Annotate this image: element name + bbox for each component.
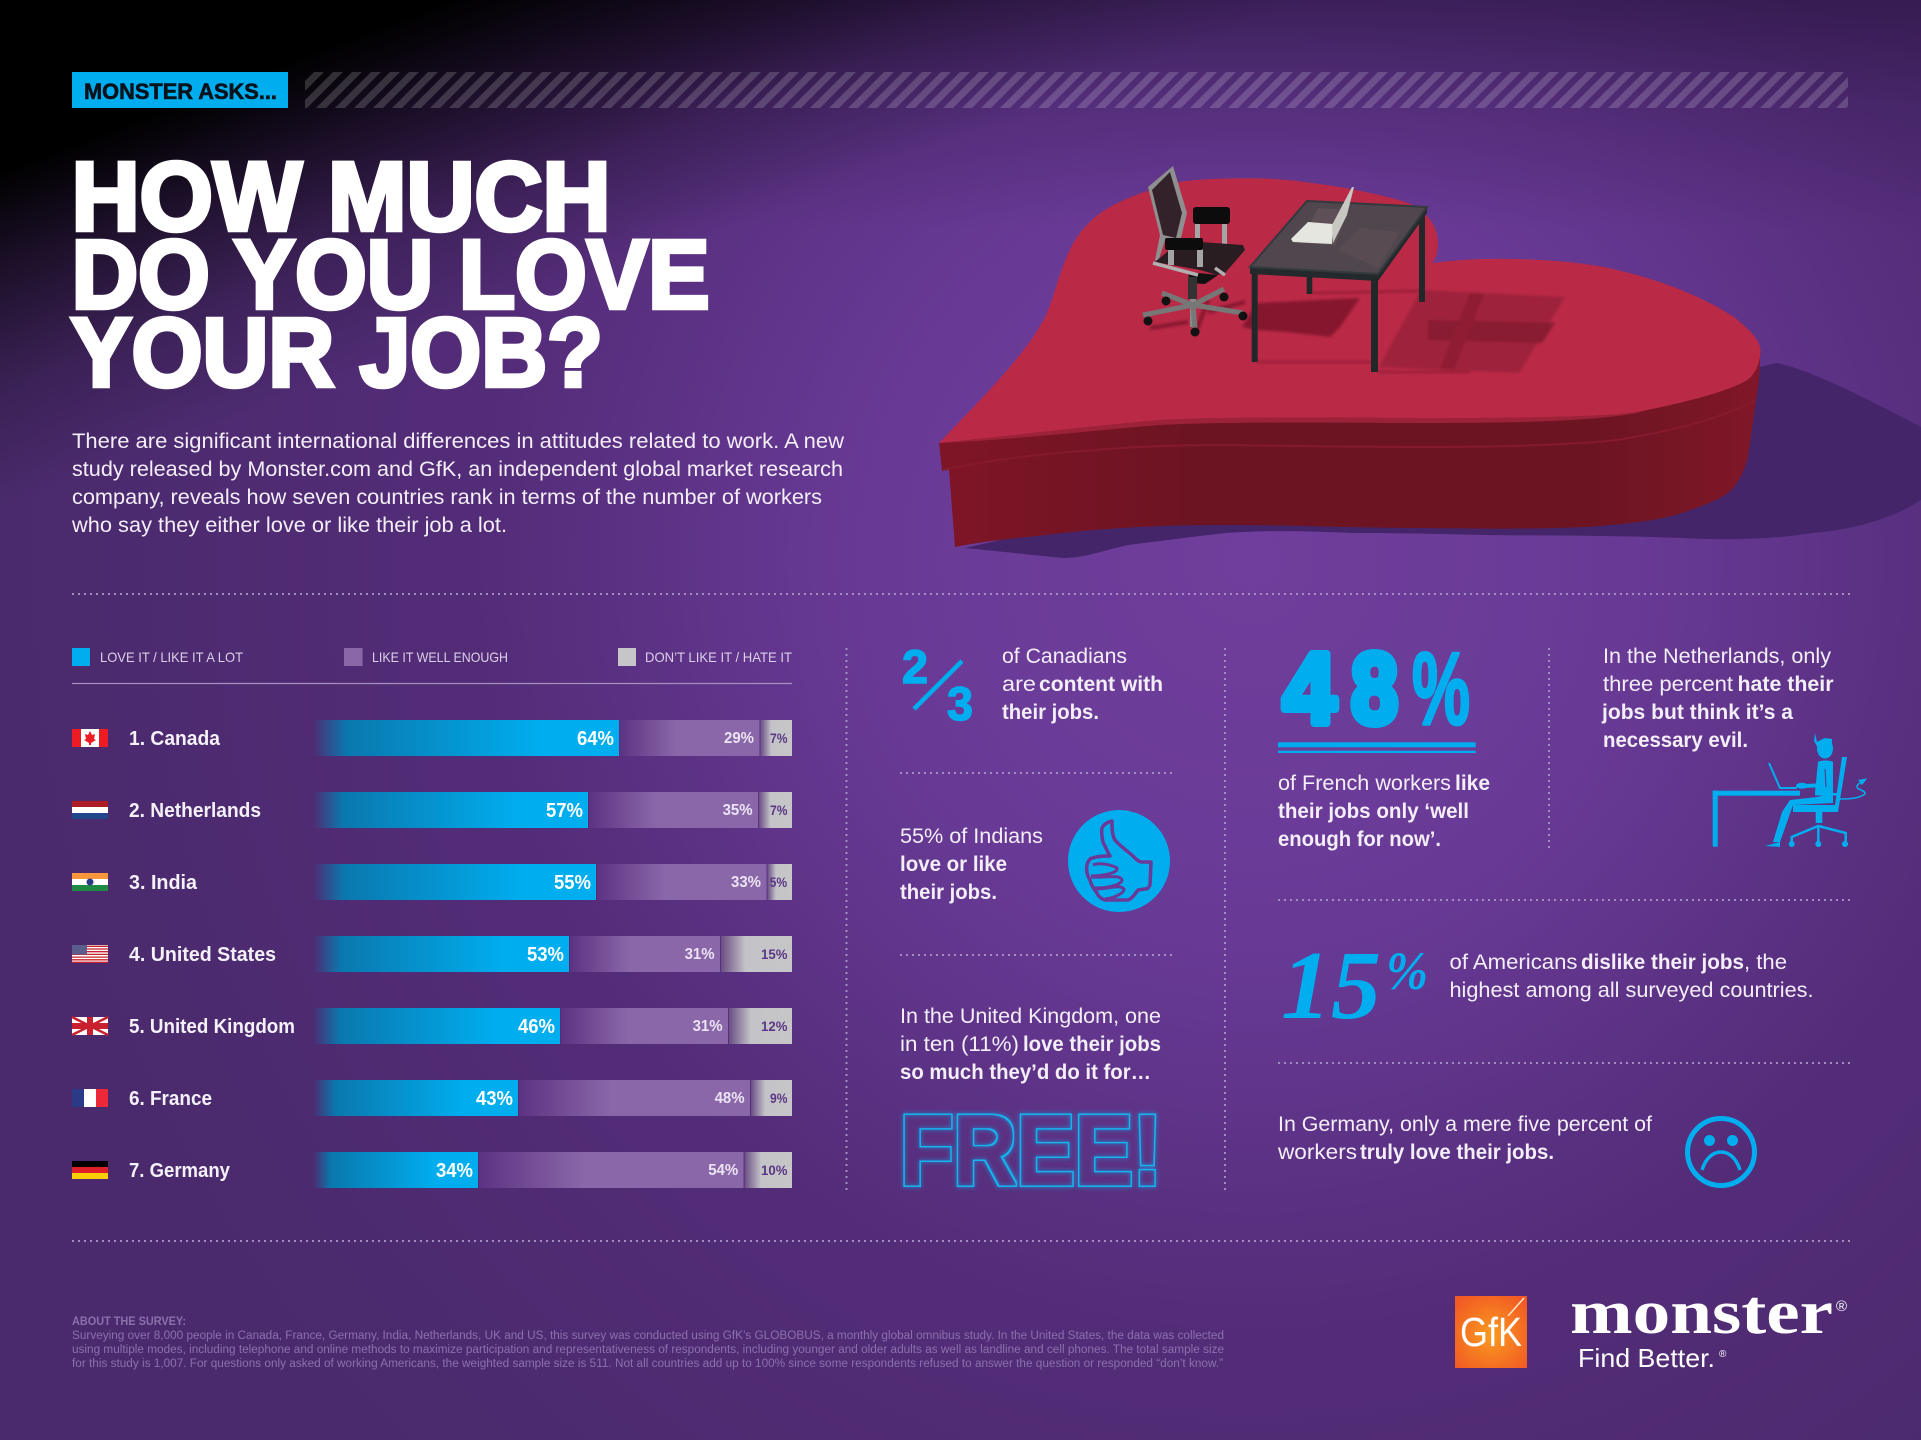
title: HOW MUCH	[72, 142, 611, 251]
logo: monster: ®	[1836, 1298, 1847, 1315]
netherlands text: In the Netherlands, only	[1603, 645, 1832, 668]
row: Germany: 10%	[761, 1162, 788, 1178]
big number: 15	[1281, 932, 1381, 1040]
big number: %	[1386, 941, 1428, 1001]
row: Germany: 7. Germany	[129, 1160, 231, 1182]
title	[71, 142, 710, 407]
big number	[1281, 932, 1428, 1040]
row: India: 55%	[554, 872, 591, 894]
netherlands text	[1601, 645, 1834, 752]
row: Canada: 64%	[577, 728, 614, 750]
row: Netherlands	[72, 792, 792, 828]
stat: Netherlands	[1601, 645, 1867, 847]
icon: devil at desk	[1713, 733, 1867, 847]
americans text	[1450, 951, 1814, 1002]
french text: their jobs only ‘well	[1278, 800, 1469, 823]
icon: sad face	[1688, 1118, 1754, 1186]
stat: Germany	[1277, 1113, 1754, 1186]
big number: 8	[1351, 633, 1398, 745]
canadians text: are	[1002, 673, 1036, 696]
germany text: In Germany, only a mere five percent of	[1278, 1113, 1652, 1136]
icon: thumbs up	[1068, 810, 1170, 912]
row: United States: 31%	[685, 946, 715, 963]
desk	[1250, 201, 1427, 372]
heart shadow	[965, 363, 1921, 558]
tag: monster asks	[72, 72, 288, 108]
about the survey	[72, 1316, 1224, 1370]
french text	[1278, 772, 1490, 851]
row: Germany: 54%	[708, 1162, 738, 1179]
fraction icon: 3	[947, 677, 973, 730]
row: United Kingdom: 31%	[693, 1018, 723, 1035]
neon free: FREE!	[900, 1094, 1162, 1206]
row: United Kingdom: 12%	[761, 1018, 788, 1034]
stat: 48 percent of French	[1278, 631, 1490, 851]
legend: LIKE IT WELL ENOUGH	[372, 649, 508, 665]
row: Canada: 1. Canada	[129, 728, 221, 750]
uk text	[900, 1005, 1161, 1084]
indians text	[900, 825, 1043, 904]
row: France	[72, 1080, 792, 1116]
office chair	[1143, 166, 1248, 336]
chair shadow	[1150, 298, 1360, 337]
uk text: love their jobs	[1023, 1033, 1161, 1056]
title: DO YOU LOVE	[72, 220, 710, 329]
logo: monster: monster	[1570, 1279, 1833, 1347]
canadians text: of Canadians	[1002, 645, 1127, 668]
big number: 4	[1283, 633, 1336, 745]
row: India	[72, 864, 792, 900]
uk text: in ten (11%)	[900, 1033, 1019, 1056]
fraction icon	[902, 640, 973, 730]
uk text: so much they’d do it for…	[900, 1061, 1151, 1084]
row: France: 9%	[770, 1090, 788, 1106]
heart lid edge	[939, 411, 1645, 443]
legend: LOVE IT / LIKE IT A LOT	[100, 649, 243, 665]
row: Netherlands: 57%	[546, 800, 583, 822]
stat: 15 percent of Americans	[1281, 932, 1814, 1040]
row: Netherlands: 35%	[723, 802, 753, 819]
row: United States: 4. United States	[129, 944, 276, 966]
row: India: 3. India	[129, 872, 198, 894]
row: Canada	[72, 720, 792, 756]
canadians text: their jobs.	[1002, 701, 1099, 724]
about the survey: ABOUT THE SURVEY:	[72, 1316, 186, 1328]
intro paragraph: There are significant international differences in attitudes related to work. A new	[72, 430, 845, 453]
netherlands text: three percent	[1603, 673, 1733, 696]
row: United Kingdom	[72, 1008, 792, 1044]
logo: GfK	[1455, 1296, 1527, 1368]
netherlands text: necessary evil.	[1603, 729, 1748, 752]
underline	[1278, 742, 1476, 753]
logo: monster: ®	[1719, 1349, 1727, 1360]
indians text: love or like	[900, 853, 1007, 876]
row: Germany	[72, 1152, 792, 1188]
indians text: their jobs.	[900, 881, 997, 904]
heart side	[939, 350, 1760, 547]
uk text: In the United Kingdom, one	[900, 1005, 1161, 1028]
stat: two thirds of Canadians	[902, 640, 1163, 730]
row: France: 48%	[715, 1090, 745, 1107]
row: France: 43%	[476, 1088, 513, 1110]
striped header band	[305, 72, 1848, 108]
row: United Kingdom: 46%	[518, 1016, 555, 1038]
germany text: workers	[1277, 1141, 1357, 1164]
americans text: of Americans	[1450, 951, 1578, 974]
intro paragraph: study released by Monster.com and GfK, an independent global market research	[72, 458, 843, 481]
stat: Indians	[900, 810, 1170, 912]
fraction icon: 2	[902, 640, 928, 693]
about the survey: using multiple modes, including telephone and online methods to maximize participation and representativeness of respondents, including younger and older adults as well as landline and cell phones. The total sample size	[72, 1344, 1224, 1356]
about the survey: Surveying over 8,000 people in Canada, France, Germany, India, Netherlands, UK and US, this survey was conducted using GfK’s GLOBOBUS, a monthly global omnibus study. In the United States, the data was collected	[72, 1330, 1224, 1342]
table shadow	[1257, 290, 1565, 373]
stat: United Kingdom	[900, 1005, 1162, 1206]
row: Germany: 34%	[436, 1160, 473, 1182]
tag: monster asks: MONSTER ASKS...	[84, 79, 277, 104]
logo: monster: Find Better.	[1578, 1343, 1715, 1373]
legend: DON’T LIKE IT / HATE IT	[645, 649, 792, 665]
row: United Kingdom: 5. United Kingdom	[129, 1016, 295, 1038]
laptop	[1291, 187, 1354, 244]
logo: monster	[1570, 1279, 1847, 1373]
french text: of French workers	[1278, 772, 1451, 795]
french text: like	[1455, 772, 1490, 795]
row: Canada: 7%	[770, 730, 788, 746]
row: India: 33%	[731, 874, 761, 891]
americans text: , the	[1744, 951, 1787, 974]
heart top surface	[939, 178, 1760, 443]
intro paragraph: company, reveals how seven countries rank in terms of the number of workers	[72, 486, 822, 509]
americans text: highest among all surveyed countries.	[1450, 979, 1814, 1002]
bar chart: job satisfaction by country	[72, 720, 792, 1188]
row: Netherlands: 2. Netherlands	[129, 800, 261, 822]
row: United States: 15%	[761, 946, 788, 962]
row: Netherlands: 7%	[770, 802, 788, 818]
row: India: 5%	[770, 874, 788, 890]
germany text: truly love their jobs.	[1360, 1141, 1554, 1164]
big number: %	[1412, 631, 1470, 746]
illustration: heart platform with desk and chair	[939, 166, 1921, 558]
netherlands text: jobs but think it’s a	[1601, 701, 1793, 724]
intro paragraph	[71, 430, 845, 537]
germany text	[1277, 1113, 1652, 1164]
row: United States	[72, 936, 792, 972]
legend	[72, 648, 792, 684]
americans text: dislike their jobs	[1581, 951, 1744, 974]
logo: GfK: GfK	[1460, 1309, 1522, 1355]
row: United States: 53%	[527, 944, 564, 966]
intro paragraph: who say they either love or like their job a lot.	[71, 514, 507, 537]
about the survey: for this study is 1,007. For questions only asked of working Americans, the weighted sample size is 511. Not all countries add up to 100% since some respondents refused to answer the question or responded “don’t know.”	[72, 1358, 1223, 1370]
canadians text: content with	[1039, 673, 1163, 696]
row: Canada: 29%	[724, 730, 754, 747]
canadians text	[1002, 645, 1163, 724]
heart side seam	[942, 400, 1754, 470]
netherlands text: hate their	[1738, 673, 1834, 696]
french text: enough for now’.	[1278, 828, 1441, 851]
indians text: 55% of Indians	[900, 825, 1043, 848]
row: France: 6. France	[129, 1088, 212, 1110]
title: YOUR JOB?	[71, 298, 603, 407]
big number	[1283, 631, 1470, 746]
